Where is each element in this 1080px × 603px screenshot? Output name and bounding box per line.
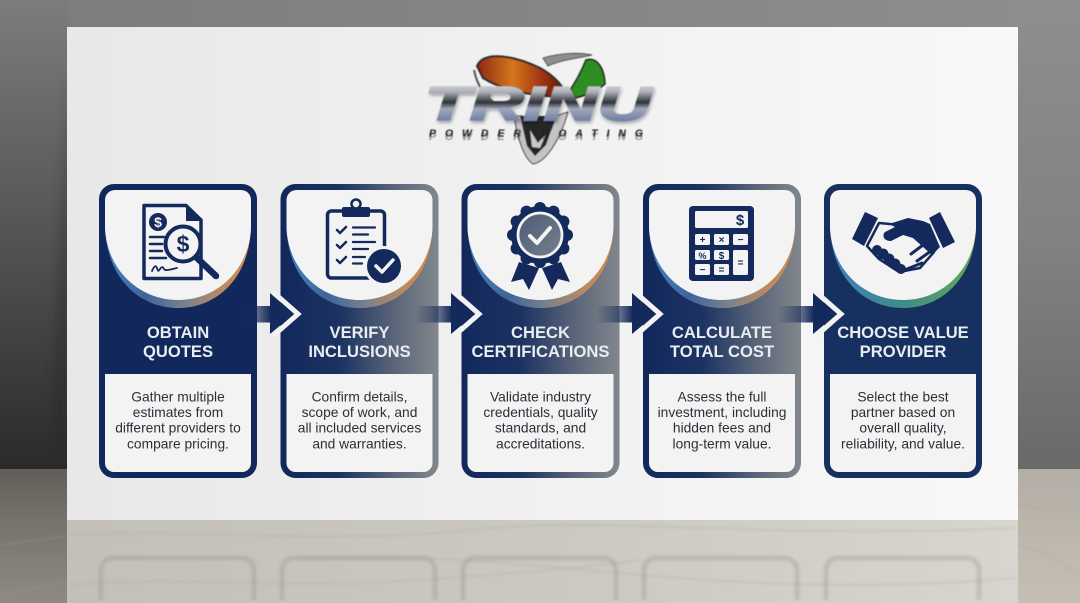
icon: calculator: − <box>738 235 744 246</box>
crescent accent <box>830 228 976 308</box>
card 5: choose value provider <box>824 184 982 478</box>
icon: calculator <box>689 206 754 281</box>
description: overall quality, <box>859 421 947 436</box>
icon: award seal with ribbons <box>507 202 573 290</box>
logo emblem swooshes <box>474 53 605 164</box>
arrow: step 2 to 3 <box>415 292 479 336</box>
description: Assess the full <box>678 390 766 404</box>
description box <box>286 374 432 472</box>
title: TOTAL COST <box>670 342 774 361</box>
description box <box>105 374 251 472</box>
title: INCLUSIONS <box>308 342 411 361</box>
description: estimates from <box>133 405 223 420</box>
white dome <box>830 190 976 300</box>
description: hidden fees and <box>673 421 771 436</box>
icon: quote document with magnifier: $ <box>177 231 190 257</box>
description: accreditations. <box>496 436 585 451</box>
card 1: obtain quotes <box>99 184 257 478</box>
description: Validate industry <box>490 390 591 404</box>
icon: calculator: × <box>719 235 725 246</box>
description box <box>649 374 795 472</box>
description: and warranties. <box>312 436 407 451</box>
card frame <box>462 184 620 478</box>
arrow: step 3 to 4 <box>596 292 660 336</box>
crescent accent <box>649 228 795 308</box>
title: CHECK <box>511 323 570 342</box>
card 2: verify inclusions <box>280 184 438 478</box>
logo wordmark: TRINU <box>425 77 653 130</box>
description: Confirm details, <box>312 390 407 404</box>
card frame <box>824 184 982 478</box>
icon: clipboard with check badge <box>328 200 404 286</box>
icon: calculator: + <box>700 235 706 246</box>
icon: calculator: = <box>719 265 725 276</box>
icon: calculator: − <box>700 265 706 276</box>
icon: calculator: = <box>738 258 744 269</box>
description: Select the best <box>857 390 949 404</box>
title: CHOOSE VALUE <box>837 323 969 342</box>
title: OBTAIN <box>147 323 209 342</box>
white dome <box>468 190 614 300</box>
logo: Trinu Powder Coating <box>425 53 653 164</box>
card 3: check certifications <box>462 184 620 478</box>
card frame <box>280 184 438 478</box>
white dome <box>105 190 251 300</box>
description: compare pricing. <box>127 436 229 451</box>
icon: calculator: % <box>698 251 707 261</box>
card 4: calculate total cost <box>643 184 801 478</box>
title: CERTIFICATIONS <box>472 342 609 361</box>
white dome <box>286 190 432 300</box>
description box <box>830 374 976 472</box>
description: long-term value. <box>673 436 771 451</box>
description: standards, and <box>495 421 586 436</box>
description: Gather multiple <box>131 390 225 404</box>
icon: calculator: $ <box>736 212 745 229</box>
title: CALCULATE <box>672 323 772 342</box>
description: reliability, and value. <box>841 436 965 451</box>
icon: quote document with magnifier: $ <box>154 214 162 230</box>
icon: calculator: $ <box>719 251 725 262</box>
card reflections on the floor <box>101 558 979 600</box>
poster board <box>67 27 1018 520</box>
icon: quote document with magnifier <box>144 205 216 278</box>
title: VERIFY <box>330 323 389 342</box>
icon: handshake <box>852 212 955 274</box>
description: all included services <box>298 421 421 436</box>
card frame <box>99 184 257 478</box>
title: QUOTES <box>143 342 213 361</box>
logo tagline: POWDER COATING <box>429 128 643 140</box>
description: different providers to <box>115 421 241 436</box>
crescent accent <box>286 228 432 308</box>
card frame <box>643 184 801 478</box>
description: investment, including <box>658 405 786 420</box>
crescent accent <box>468 228 614 308</box>
description: scope of work, and <box>302 405 417 420</box>
crescent accent <box>105 228 251 308</box>
arrow: step 1 to 2 <box>232 292 298 336</box>
title: PROVIDER <box>860 342 946 361</box>
description: credentials, quality <box>483 405 598 420</box>
arrow: step 4 to 5 <box>777 292 841 336</box>
white dome <box>649 190 795 300</box>
description: partner based on <box>851 405 955 420</box>
description box <box>468 374 614 472</box>
